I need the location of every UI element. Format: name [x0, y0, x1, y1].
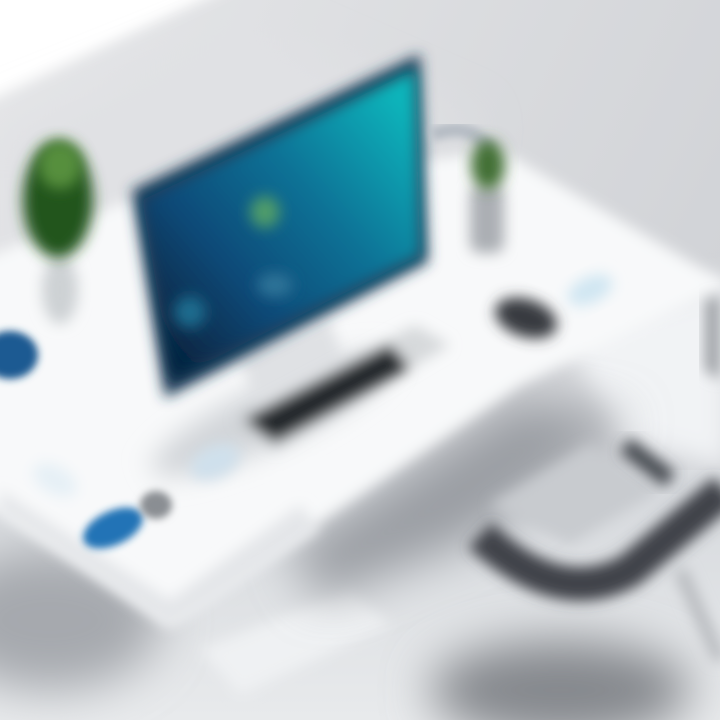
paper: left desk: [27, 456, 83, 504]
plant: left: [23, 141, 93, 324]
keyboard: [235, 325, 450, 450]
paper: light blue right: [563, 268, 617, 312]
desk top: [0, 150, 720, 628]
floor: [0, 280, 720, 720]
monitor screen: [142, 70, 420, 380]
monitor bezel: [132, 54, 428, 398]
screen widget: [250, 196, 280, 228]
desk lamp arm: [432, 130, 490, 150]
blue object: left edge: [0, 331, 38, 379]
monitor shadow on desk: [140, 333, 400, 497]
monitor stand: [240, 320, 345, 410]
chair: [480, 295, 720, 660]
blue object: front desk: [77, 491, 172, 557]
mouse: [490, 290, 562, 346]
chair back: [705, 295, 720, 380]
chair frame: [480, 490, 720, 584]
plant: right: [470, 140, 505, 253]
paper: light blue front: [185, 437, 245, 487]
monitor: [132, 54, 428, 410]
chair seat: [490, 445, 660, 545]
